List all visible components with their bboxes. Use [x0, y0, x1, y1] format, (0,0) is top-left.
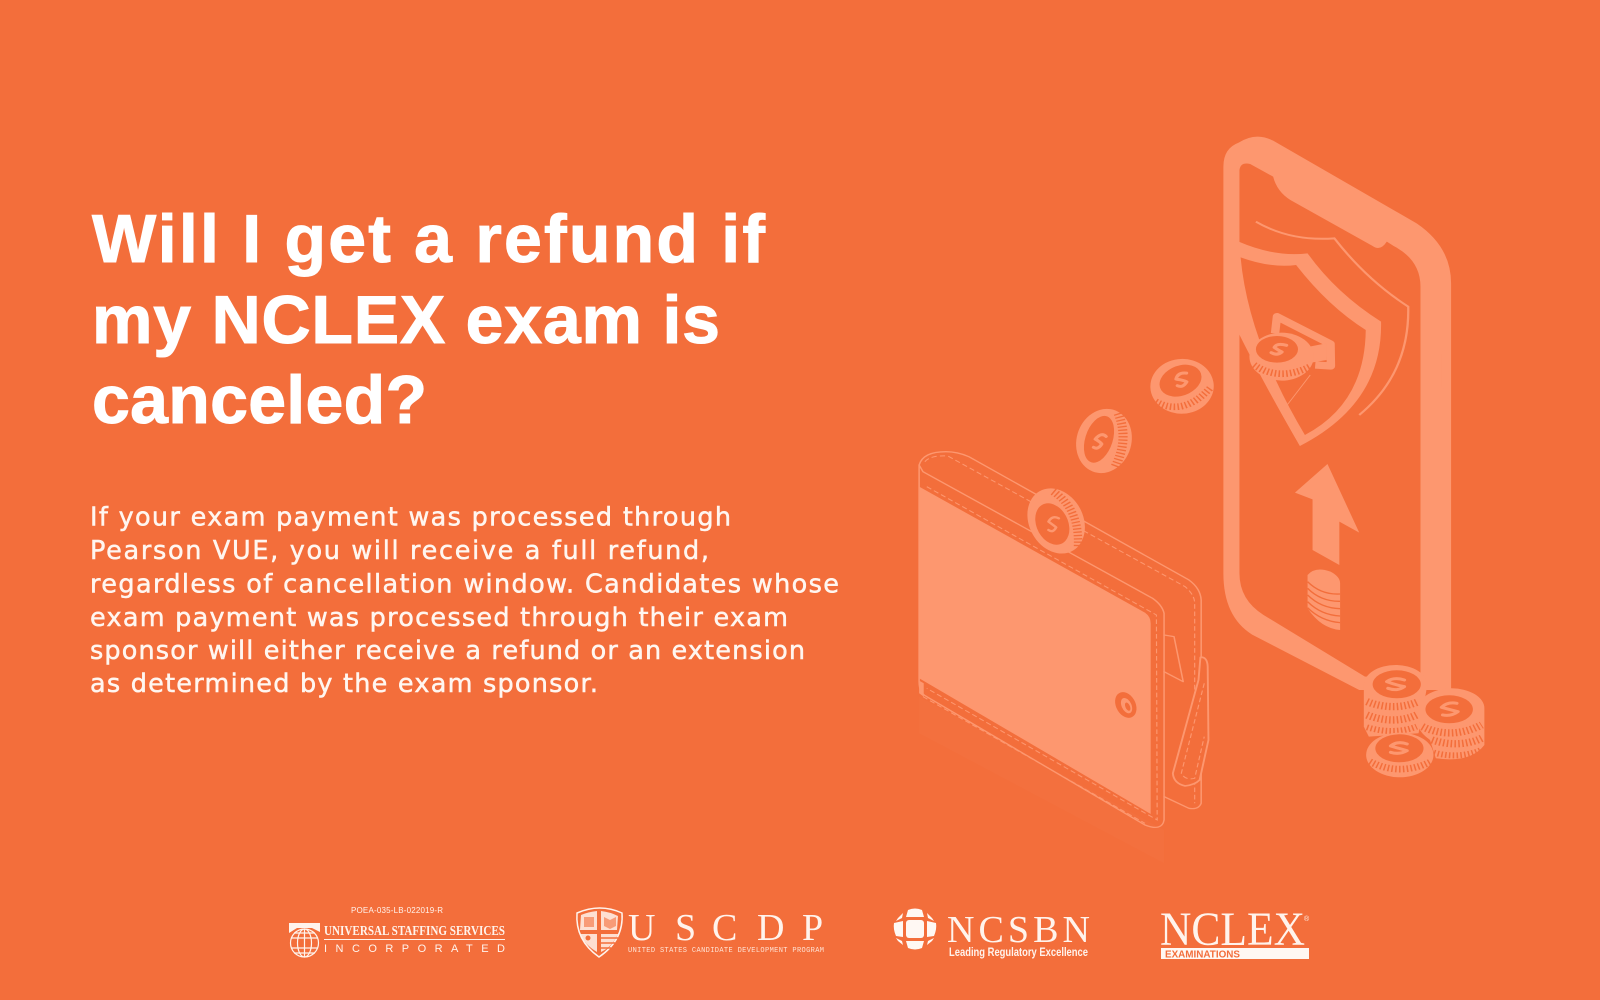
- icon: smartphone: [1223, 137, 1451, 690]
- logo: Universal Staffing Services: [289, 906, 505, 957]
- logo: NCSBN: Leading Regulatory Excellence: [949, 947, 1088, 959]
- coin front: [1366, 733, 1433, 777]
- body text: [90, 502, 839, 699]
- body text: as determined by the exam sponsor.: [90, 669, 598, 699]
- icon: USCDP shield: [577, 908, 622, 957]
- body text: exam payment was processed through their exam: [90, 603, 788, 633]
- logo: USCDP: P: [802, 907, 823, 949]
- logo: USCDP: U: [628, 907, 655, 949]
- logo: USCDP: C: [712, 907, 737, 949]
- logo: USCDP: UNITED STATES CANDIDATE DEVELOPMENT PROGRAM: [628, 947, 824, 955]
- logo: USCDP: S: [675, 907, 696, 949]
- icon: shield on phone screen: [1239, 222, 1408, 446]
- icon: globe: [289, 923, 320, 957]
- icon: coin stack on screen: [1308, 569, 1340, 630]
- title: canceled?: [92, 362, 427, 438]
- logo: USCDP: D: [757, 907, 784, 949]
- logo: USCDP: [577, 907, 824, 957]
- body text: sponsor will either receive a refund or an extension: [90, 636, 805, 666]
- icon: wallet: [919, 452, 1208, 863]
- logo: NCSBN: [894, 908, 1090, 959]
- icon: wallet strap: [1173, 657, 1208, 786]
- icon: wallet clasp: [1111, 689, 1140, 720]
- logo: NCSBN: NCSBN: [947, 909, 1090, 951]
- logo: Universal Staffing Services: INCORPORATED: [324, 943, 505, 955]
- logo: Universal Staffing Services: UNIVERSAL STAFFING SERVICES: [324, 923, 505, 938]
- icon: flying coin top: [1140, 350, 1224, 423]
- body text: Pearson VUE, you will receive a full refund,: [90, 536, 709, 566]
- logo: NCLEX Examinations: EXAMINATIONS: [1165, 950, 1240, 960]
- icon: coin in phone slot: [1249, 333, 1314, 381]
- title: [92, 201, 765, 438]
- icon: up arrow: [1295, 464, 1359, 565]
- coin stack left: [1364, 665, 1427, 737]
- icon: coin pile: [1364, 665, 1484, 777]
- icon: coin in wallet: [1018, 482, 1094, 560]
- logo: NCLEX Examinations: NCLEX: [1160, 903, 1305, 956]
- logo: NCLEX Examinations: ®: [1304, 915, 1310, 923]
- illustration: phone, coins and wallet: [919, 137, 1484, 863]
- coin stack right: [1419, 688, 1484, 759]
- body text: If your exam payment was processed through: [90, 502, 731, 532]
- title: Will I get a refund if: [92, 201, 765, 277]
- title: my NCLEX exam is: [92, 282, 720, 358]
- body text: regardless of cancellation window. Candidates whose: [90, 570, 839, 600]
- icon: flying coin middle: [1070, 405, 1138, 477]
- license number: POEA-035-LB-022019-R: [351, 906, 443, 915]
- icon: NCSBN globe: [894, 908, 936, 950]
